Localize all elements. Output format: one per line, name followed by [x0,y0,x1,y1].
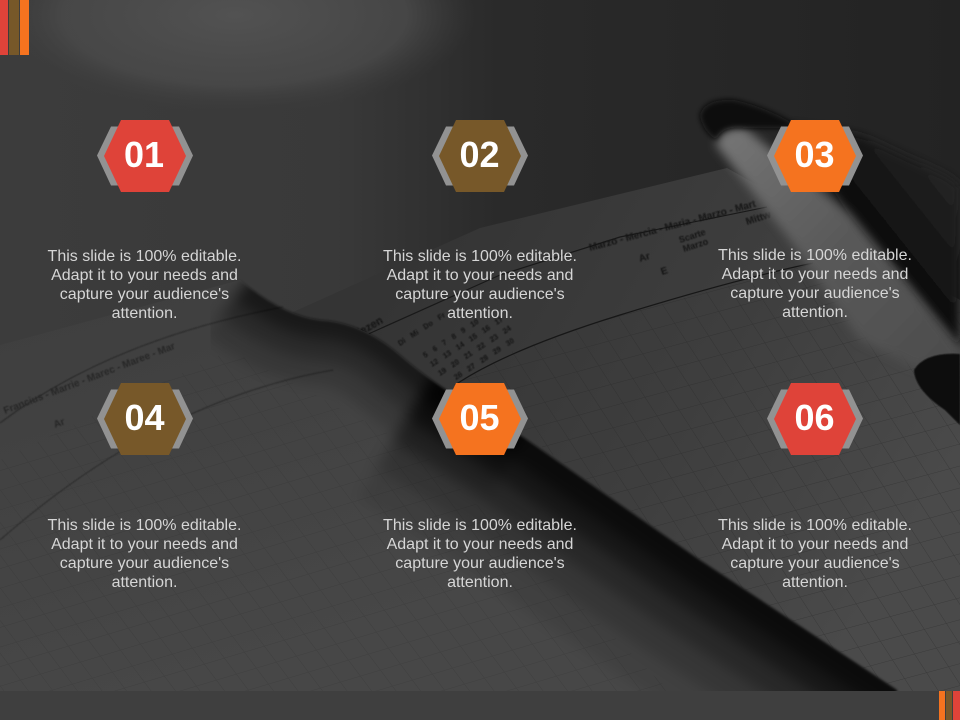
text 02: This slide is 100% editable. [383,248,577,265]
text 05: capture your audience's [395,555,565,572]
hexagon 01 [97,120,193,192]
text 05: attention. [447,574,513,591]
item 04 [48,383,241,591]
text 02: capture your audience's [395,286,565,303]
text 01 [48,248,241,322]
planner calendar dates: 19 20 21 22 23 24 [436,323,513,378]
item 01 [48,120,241,322]
text 05: This slide is 100% editable. [383,517,577,534]
text 01: Adapt it to your needs and [51,267,238,284]
top-left accent stripes [0,0,29,55]
bottom bar [0,691,960,720]
book gutter shadow [245,284,930,712]
planner calendar dates: 5 6 7 8 9 10 [421,317,480,360]
item 03 [718,120,912,321]
hexagon 06: 06 [794,397,835,438]
text 01: This slide is 100% editable. [48,248,241,265]
text 06 [718,517,912,591]
item 02 [383,120,577,322]
text 03: Adapt it to your needs and [722,266,908,283]
text 01: attention. [112,305,177,322]
planner calendar dates: 12 13 14 15 16 17 [428,315,505,369]
right page: Ar [638,251,652,265]
pen [700,100,960,425]
planner calendar dates: 26 27 28 29 30 [452,336,516,382]
right page: E [660,265,670,278]
hexagon 04 [97,383,193,455]
right page: Marzo [682,236,710,254]
text 05 [383,517,577,591]
hexagon 02 [432,120,528,192]
text 02: Adapt it to your needs and [387,267,573,284]
planner calendar dates: Blezen [348,314,385,343]
hexagon 05 [432,383,528,455]
text 02: attention. [447,305,513,322]
hexagon 03: 03 [794,134,835,175]
text 05: Adapt it to your needs and [387,536,573,553]
left page [0,280,897,720]
hexagon 06 [767,383,863,455]
text 06: attention. [782,574,848,591]
right page: Marzo - Mercia - Maria - Marzo - Mart [588,199,758,254]
right page: Mittw [745,209,772,228]
text 04: Adapt it to your needs and [51,536,238,553]
text 06: This slide is 100% editable. [718,517,912,534]
planner calendar dates [348,310,516,382]
text 04 [48,517,241,591]
item 06 [718,383,912,591]
right page: Scarte [678,227,707,245]
bottom-right accent stripes [939,691,960,720]
item 05 [383,383,577,591]
hexagon 05: 05 [459,397,500,438]
text 04: attention. [112,574,177,591]
text 03: capture your audience's [730,285,900,302]
hexagon 03 [767,120,863,192]
text 04: This slide is 100% editable. [48,517,241,534]
text 06: Adapt it to your needs and [722,536,908,553]
text 01: capture your audience's [60,286,229,303]
text 03: This slide is 100% editable. [718,247,912,264]
planner calendar dates: Di Mi Do Fr [396,310,447,348]
hexagon 02: 02 [459,134,500,175]
text 04: capture your audience's [60,555,229,572]
left page: Francius - Marrie - Marec - Maree - Mar [2,341,177,417]
text 02 [383,248,577,322]
hexagon 04: 04 [124,397,164,438]
text 03: attention. [782,304,848,321]
left page: Ar [52,417,67,431]
right page [293,168,960,720]
text 03 [718,247,912,321]
text 06: capture your audience's [730,555,900,572]
hexagon 01: 01 [123,134,164,175]
